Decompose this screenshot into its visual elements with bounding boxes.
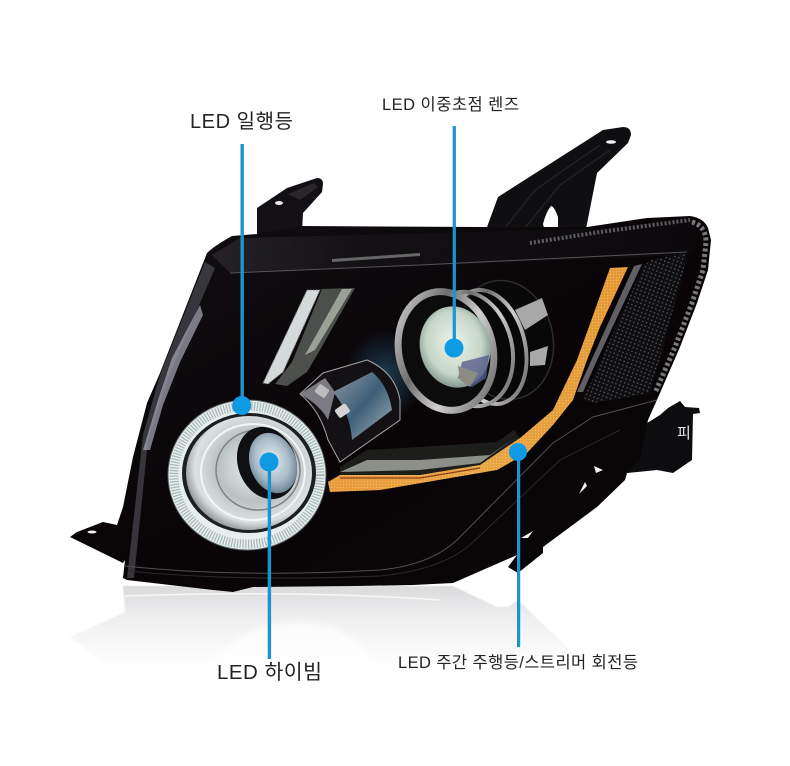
- chrome trim above amber strip: [340, 430, 520, 476]
- amber LED streamer strip: [328, 267, 628, 492]
- lens crease lines: [230, 252, 687, 273]
- callout: LED DRL and streamer turn signal: LED 주간 주행등/스트리머 회전등: [398, 653, 638, 672]
- lower vent holes: [521, 466, 603, 538]
- front chrome bezel: [386, 281, 506, 421]
- upper projector lens assembly: [386, 271, 564, 421]
- third chrome ring: [415, 283, 525, 415]
- projector rear shroud: [446, 271, 564, 409]
- headlight housing: [70, 216, 711, 592]
- left translucent edge: [127, 262, 215, 578]
- chrome side strip: [275, 288, 355, 386]
- glass lens: [411, 299, 499, 395]
- lens upper band: [212, 220, 704, 273]
- right mounting bracket: [483, 127, 631, 238]
- reflector bowl: [182, 413, 316, 533]
- callout: LED DRL and streamer turn signal: [398, 443, 638, 672]
- rear chrome bulb housing: [300, 360, 400, 462]
- right indicator mesh panel: [583, 253, 687, 403]
- bottom left tab hole: [88, 530, 96, 534]
- connector marking: 피: [677, 425, 691, 442]
- callout: LED bifocal lens: LED 이중초점 렌즈: [382, 95, 519, 114]
- reflection below the headlight: [70, 586, 570, 668]
- projector glass: [241, 426, 305, 500]
- callout: LED daytime light: LED 일행등: [190, 110, 293, 133]
- left mounting bracket: [257, 178, 323, 240]
- callout: LED daytime light: [190, 110, 293, 415]
- carbon textured top strip: [530, 220, 690, 243]
- halo LED ring: [168, 400, 326, 550]
- lower lens crease: [125, 400, 657, 573]
- rear connector tab: [620, 401, 700, 473]
- projector lens dark rim: [227, 418, 307, 508]
- blue starfield glow between lenses: [345, 330, 425, 420]
- white LED side strip: [263, 288, 355, 386]
- second chrome ring: [438, 282, 538, 412]
- lower halo headlamp: [168, 400, 326, 550]
- chrome edge beside amber strip: [577, 264, 642, 392]
- top edge highlight: [332, 253, 420, 262]
- rear chrome fittings: [515, 298, 548, 366]
- reflector concentric rings: [201, 424, 305, 520]
- callout: LED bifocal lens: [382, 95, 519, 358]
- left edge highlights: [143, 305, 203, 450]
- lens reflection: [458, 355, 489, 387]
- carbon textured right edge: [655, 222, 706, 393]
- callout: LED high beam: LED 하이빔: [217, 661, 322, 684]
- callout: LED high beam: [217, 452, 322, 684]
